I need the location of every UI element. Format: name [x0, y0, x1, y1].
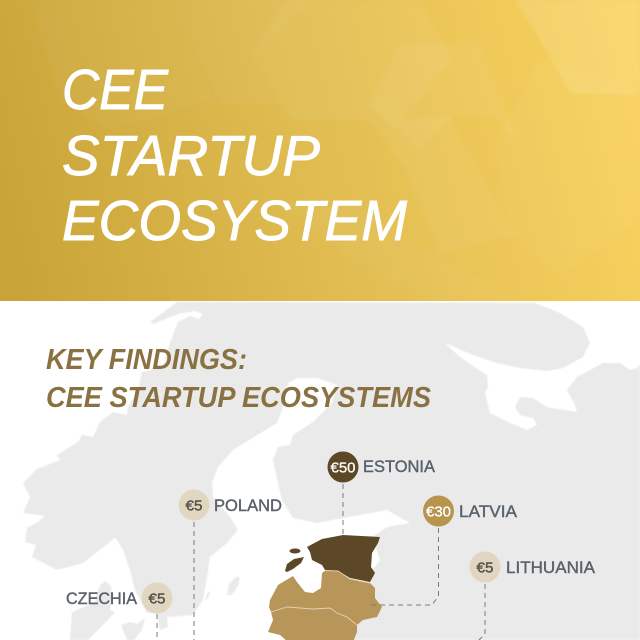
title: STARTUP — [62, 124, 320, 188]
title: ECOSYSTEM — [62, 189, 407, 253]
map: Jutland — [70, 581, 115, 640]
heading: key findings: KEY FINDINGS: — [46, 344, 247, 376]
callout: Latvia: €30 — [426, 504, 451, 520]
map: Latvia — [269, 571, 382, 625]
callout: Czechia — [66, 582, 172, 640]
map: Estonia — [307, 535, 380, 582]
map: Lithuania — [268, 607, 357, 640]
header gradient — [0, 0, 640, 301]
title: CEE — [62, 58, 169, 122]
callout: Poland: POLAND — [214, 497, 282, 515]
map: Gotland island — [227, 577, 240, 595]
map: country borders — [271, 570, 370, 625]
callout: Estonia: €50 — [330, 460, 356, 476]
callout: Czechia: €5 — [148, 590, 166, 608]
map: Saaremaa island — [285, 557, 304, 572]
panel: gold header background — [0, 0, 640, 301]
header hexagon pattern — [30, 0, 640, 300]
heading: key findings: CEE STARTUP ECOSYSTEMS — [46, 382, 432, 414]
callout: Latvia — [368, 496, 517, 605]
callout: Lithuania: LITHUANIA — [506, 559, 595, 577]
callout: Lithuania: €5 — [476, 560, 494, 576]
map: Oland island — [205, 591, 211, 600]
callout: Estonia — [328, 452, 435, 535]
callout: Czechia: CZECHIA — [66, 590, 137, 608]
heading: key findings — [46, 344, 432, 414]
callout: Lithuania — [470, 552, 595, 640]
panel: map of the region — [23, 302, 640, 640]
callout: Latvia: LATVIA — [459, 503, 517, 521]
callout: Poland — [178, 490, 282, 640]
callout: Poland: €5 — [186, 498, 202, 514]
callout: Estonia: ESTONIA — [363, 458, 435, 476]
map: Zealand — [121, 618, 145, 640]
map: Hiiumaa island — [290, 548, 300, 554]
title — [62, 58, 407, 253]
map: grey land mass — [23, 302, 640, 640]
